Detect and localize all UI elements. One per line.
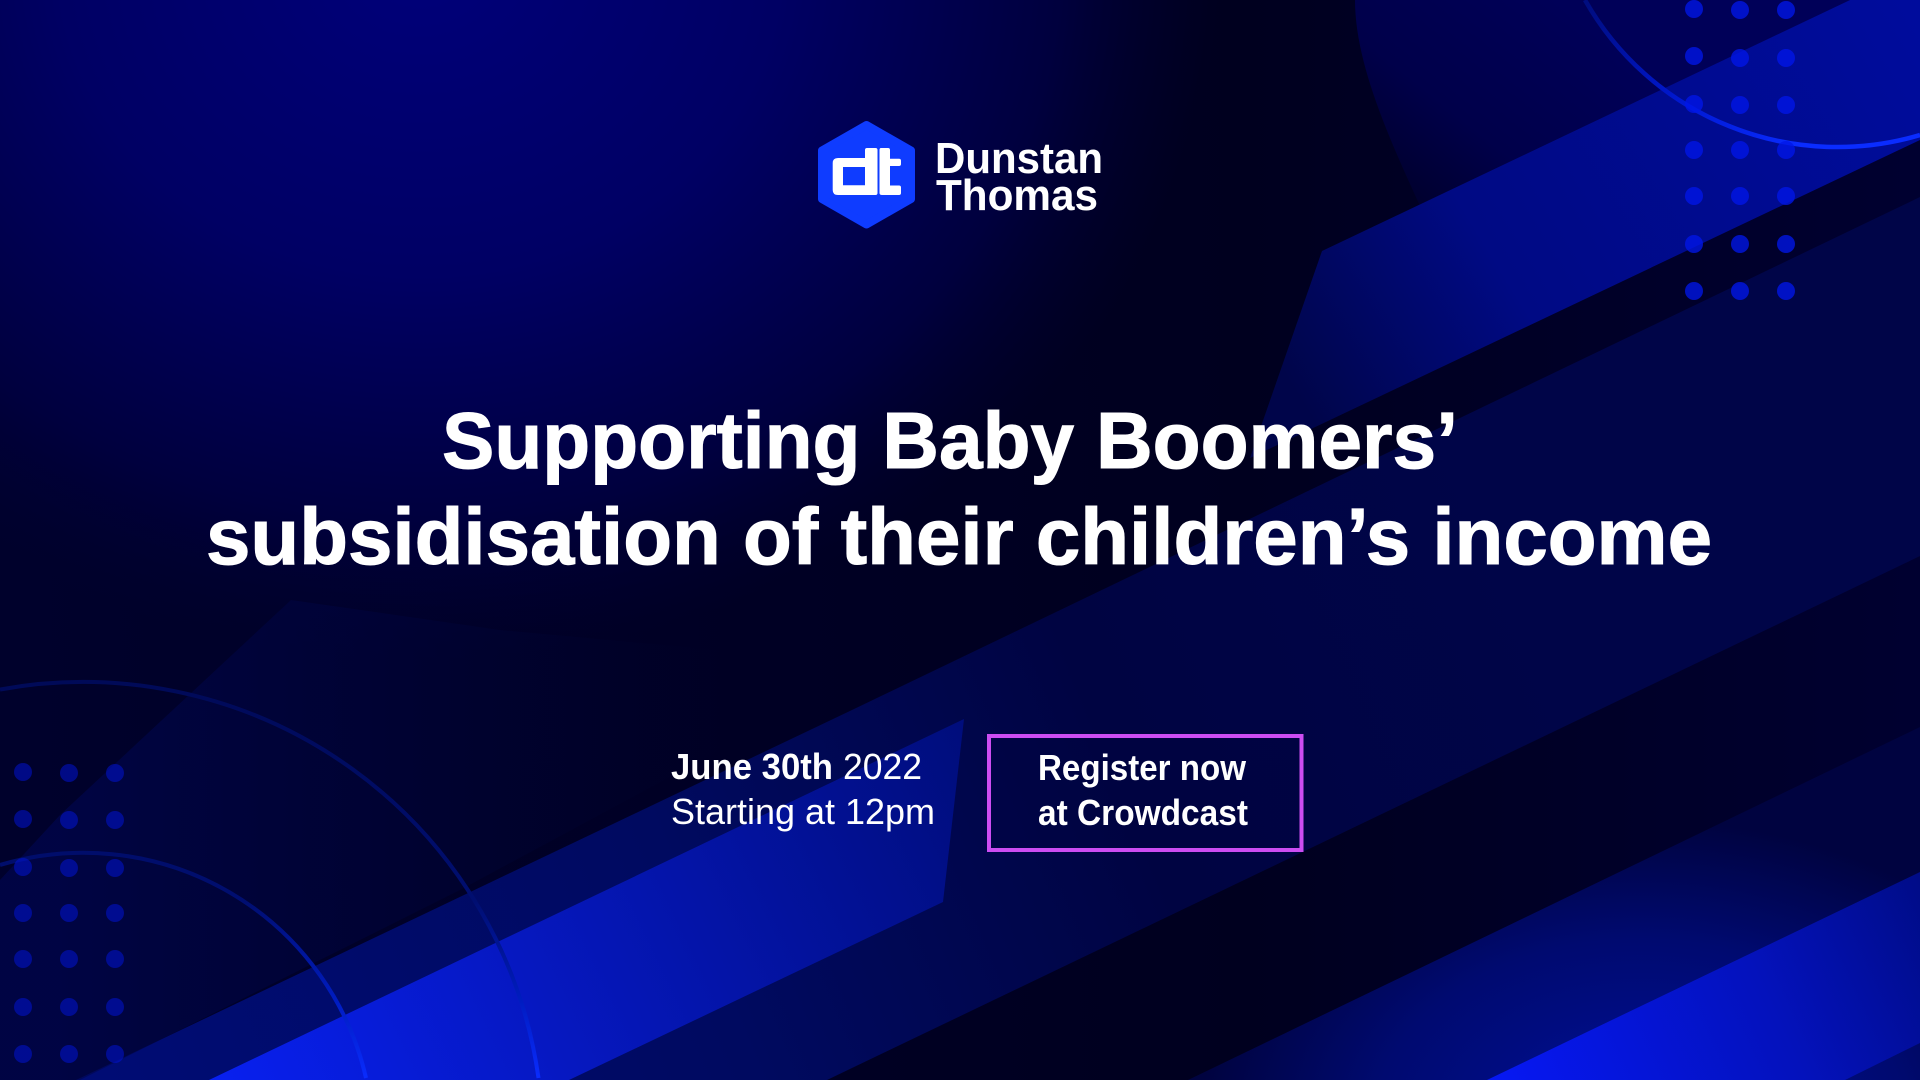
- event date and time: 2022: [843, 746, 922, 787]
- decorative ring: inner bottom left: [0, 853, 366, 1078]
- dot grid: bottom left: [14, 763, 124, 1063]
- event date and time: June 30th: [671, 746, 833, 787]
- decorative band: lower right glow: [1188, 727, 1920, 1080]
- logo: Dunstan Thomas: [822, 125, 1103, 224]
- title: Supporting Baby Boomers’: [442, 396, 1458, 485]
- title: subsidisation of their children’s income: [206, 492, 1712, 581]
- event date and time: Starting at 12pm: [671, 791, 935, 832]
- decorative band: bright lower right: [1487, 872, 1920, 1080]
- title: [206, 396, 1712, 581]
- call to action button: Register now: [1038, 747, 1247, 788]
- decorative band: bright lower left: [209, 719, 964, 1080]
- logo wordmark: Thomas: [936, 171, 1098, 220]
- decorative ring: outer bottom left: [0, 682, 538, 1078]
- dot grid: top right: [1685, 0, 1795, 300]
- call to action button: at Crowdcast: [1038, 792, 1248, 833]
- decorative faint panel: lower left: [0, 600, 720, 1080]
- icon: hexagon dt mark: [822, 125, 911, 224]
- decorative ring: top right: [1585, 0, 1920, 147]
- logo wordmark: Dunstan: [935, 134, 1103, 183]
- decorative band: lower right region: [76, 197, 1920, 1080]
- logo wordmark: [935, 134, 1103, 220]
- call to action button: [989, 736, 1302, 850]
- event date and time: [671, 746, 935, 832]
- decorative band: top right: [1250, 0, 1920, 458]
